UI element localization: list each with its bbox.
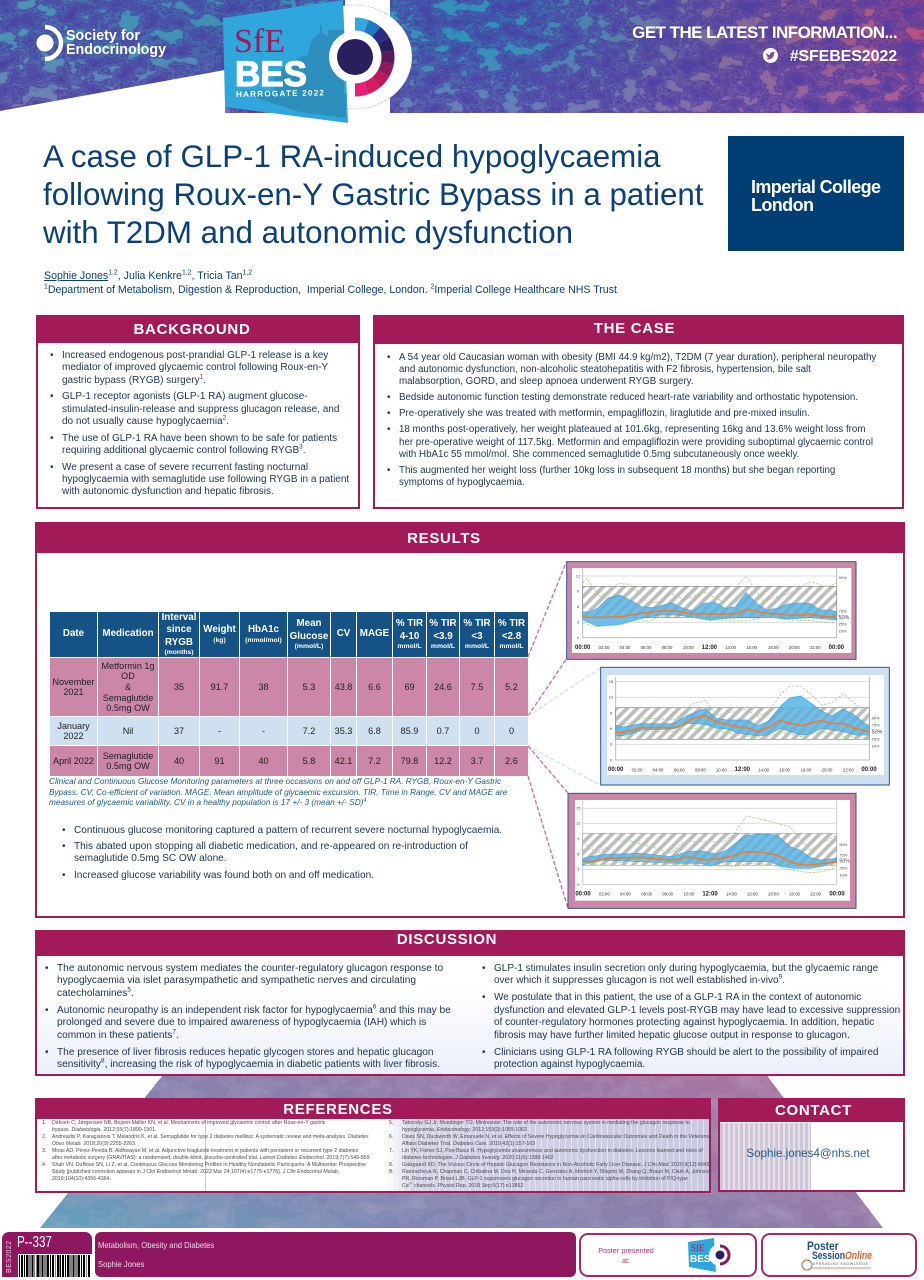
heading: contact: CONTACT [775,1102,852,1119]
results table: 12.2 [434,756,452,766]
text: case bullets: Pre-operatively she was treated with metformin, empagliflozin, liraglutide and pre-mixed insulin. [399,408,810,419]
logo: Imperial College London [728,136,904,251]
header banner [0,0,924,113]
results table [50,612,528,776]
text: results bullets: This abated upon stopping all diabetic medication, and re-appeared on re-introduction of [74,841,468,852]
results table: mmol/L [499,643,524,650]
chart: April 2022 glucose profile: 08:00 [662,891,674,896]
chart: April 2022 glucose profile: 14:00 [726,891,737,896]
title [43,139,704,250]
table caption: Clinical and Continuous Glucose Monitoring parameters at three occasions on and off GLP-1 RA. RYGB, Roux-en-Y Gastric [49,777,501,786]
results table: 0 [474,726,480,736]
building silhouette [240,25,346,118]
chart: November 2021 glucose profile: 10:00 [683,645,694,650]
results table: 37 [174,726,184,736]
results table: 42.1 [335,756,352,766]
results table: 5.2 [505,682,518,692]
text: contact email: Sophie.jones4@nhs.net [746,1147,870,1160]
footer: topic and author bar [95,1232,576,1277]
chart: November 2021 glucose profile: 16:00 [746,645,758,650]
text: references right column: Lin YK, Fisher SJ, Pop-Busui R. Hypoglycemia unawareness and autonomic dysfunction in diabetes: Lessons learned and roles of [402,1148,703,1154]
chart: January 2022 glucose profile: 15 [609,679,614,684]
text: case bullets: symptoms of hypoglycaemia. [399,477,525,488]
chart: November 2021 glucose profile: 90% [839,575,847,580]
chart: January 2022 glucose profile: 00:00 [608,767,624,773]
text: references right column: hypoglycemia. Endocrinology. 2012;153(3):1055-1062 [402,1127,527,1133]
results table: April 2022 [53,756,94,766]
heading: results [35,522,905,553]
chart: January 2022 glucose profile: 3 [610,742,613,747]
heading: discussion: DISCUSSION [397,931,497,948]
text: case bullets: with HbA1c 55 mmol/mol. She commenced semaglutide 0.5mg subcutaneously once weekly. [399,449,799,460]
heading: contact [718,1098,905,1122]
text: references right column: Taborsky GJ Jr, Mundinger TO. Minireview: The role of the autonomic nervous system in mediating the glucagon response to [402,1120,690,1126]
chart: January 2022 glucose profile: 75% [872,723,880,728]
text: background bullets: GLP-1 receptor agonists (GLP-1 RA) augment glucose- [62,391,308,402]
chart: November 2021 glucose profile [567,562,856,659]
authors and affiliations: 1Department of Metabolism, Digestion & Reproduction, Imperial College, London. 2Imperial College Healthcare NHS Trust [44,283,617,296]
results table: Semaglutide 0.5mg OW [103,693,153,713]
text: case bullets: 18 months post-operatively, her weight plateaued at 101.6kg, representing 16kg and 13.6% weight loss from [399,424,865,435]
chart: January 2022 glucose profile: 14:00 [758,767,770,772]
chart: November 2021 glucose profile: 12 [576,573,581,578]
text: references left column: Obes Metab. 2018;20(9):2255-2263. [52,1141,136,1147]
chart: November 2021 glucose profile: 18:00 [768,645,779,650]
text: background bullets: do not usually cause hypoglycaemia2. [62,415,229,427]
panel: contact [718,1098,905,1192]
chart: April 2022 glucose profile: 12 [576,821,581,826]
text: conference code: BES2022 [6,1241,13,1273]
chart: April 2022 glucose profile: 50% [839,859,850,865]
chart: November 2021 glucose profile: 50% [839,615,850,621]
chart: January 2022 glucose profile: 16:00 [779,767,791,772]
text: background bullets: with autonomic dysfunction and hepatic fibrosis. [62,486,274,497]
chart: April 2022 glucose profile: 04:00 [620,891,631,896]
results table: % TIR <3 [463,618,491,642]
footer: Poster Session Online logo [761,1233,917,1277]
logo: Society for Endocrinology [36,24,166,62]
text: case bullets: A 54 year old Caucasian woman with obesity (BMI 44.9 kg/m2), T2DM (7 year duration), peripheral neuropathy [399,352,876,363]
text: discussion right column: over which it suppresses glucagon is not well established in-vivo9. [494,974,785,986]
results table: (kg) [213,637,226,644]
chart: January 2022 glucose profile: 10:00 [716,767,727,772]
heading: the case [373,315,904,344]
results table: 43.8 [335,682,352,692]
text: discussion left column: catecholamines5. [57,986,134,999]
chart: January 2022 glucose profile: 0 [610,757,613,762]
chart: November 2021 glucose profile: 02:00 [599,645,610,650]
chart: April 2022 glucose profile: 00:00 [829,892,845,898]
text: references right column: Ca2+ channels. Physiol Rep. 2018 Sep;6(17):e13852 [402,1181,523,1189]
text: background bullets [50,350,350,497]
text: discussion left column: The presence of liver fibrosis reduces hepatic glycogen stores and hepatic glucagon [57,1047,434,1058]
text: discussion right column: dysfunction and elevated GLP-1 levels post-RYGB may have lead to excessive suppression [494,1005,900,1016]
logo: Imperial College London: London [751,195,813,215]
text: references left column [42,1120,370,1182]
text: case bullets: her pre-operative weight of 117.5kg. Metformin and empagliflozin were providing suboptimal glycaemic control [399,437,873,448]
barcode [18,1254,92,1277]
chart: November 2021 glucose profile: 14:00 [725,645,737,650]
text: references right column: Galsgaard KD. The Vicious Circle of Hepatic Glucagon Resistance in Non-Alcoholic Fatty Liver Disease. J Clin Med. 2020;9(12):4049 [402,1162,710,1168]
chart: April 2022 glucose profile: 16:00 [747,891,758,896]
chart: April 2022 glucose profile: 25% [839,865,848,870]
panel: the case [373,315,904,509]
text: results bullets: Continuous glucose monitoring captured a pattern of recurrent severe nocturnal hypoglycaemia. [74,825,502,836]
chart: November 2021 glucose profile: 08:00 [662,645,673,650]
text: background bullets: gastric bypass (RYGB) surgery1. [62,373,206,386]
text: references right column: Ramracheya R, Chapman C, Chibalina M, Dou H, Miranda C, González A, Moritoh Y, Shigeto M, Zhang Q, Braun M, Clark A, Johnson [402,1169,711,1175]
chart: April 2022 glucose profile: 02:00 [599,891,610,896]
authors and affiliations: Sophie Jones1,2, Julia Kenkre1,2, Tricia Tan1,2 [44,269,252,282]
results table: % TIR <2.8 [498,618,525,642]
results table: 3.7 [471,756,483,766]
chart: April 2022 glucose profile: 06:00 [641,891,653,896]
panel: references: 3. [42,1148,46,1154]
chart: January 2022 glucose profile: 04:00 [653,767,664,772]
panel: discussion [35,930,905,1076]
results table: (mmol/mol) [245,637,282,644]
text: references left column: bypass. Diabetologia. 2012;55(7):1890-1901. [52,1127,156,1133]
results table: 91 [214,756,225,766]
results table: 0 [509,726,514,736]
chart: April 2022 glucose profile: 10% [839,873,848,878]
chart: November 2021 glucose profile: 0 [577,635,580,640]
footer: topic and author bar: Sophie Jones [98,1259,144,1269]
chart: January 2022 glucose profile [601,667,889,785]
text: background bullets: Increased endogenous post-prandial GLP-1 release is a key [62,350,328,361]
chart: November 2021 glucose profile: 12:00 [702,645,718,651]
chart: November 2021 glucose profile: 00:00 [829,645,845,651]
panel: background [36,315,360,509]
heading: discussion [35,930,905,956]
results table: 40 [258,756,269,766]
text: results bullets: Increased glucose variability was found both on and off medication. [74,870,374,881]
results table: - [218,726,221,736]
authors and affiliations [44,269,617,296]
results table: MAGE [360,628,389,639]
text: discussion left column: common in these patients7. [57,1028,179,1041]
panel: references [35,1098,711,1193]
chart: November 2021 glucose profile: 3 [577,620,580,625]
results table: 91.7 [211,682,228,692]
footer: Poster Session Online logo: Poster [807,1240,839,1253]
title: with T2DM and autonomic dysfunction [43,215,573,250]
text: references left column: Study [published correction appears in J Clin Endocrinol Metab. 2022 Mar 24;107(4):e1775-e1776]. J Clin Endocrinol Metab. [52,1169,339,1175]
results table: Semaglutide 0.5mg OW [103,751,153,771]
chart: April 2022 glucose profile: 12:00 [702,892,718,898]
logo: SfE BES Harrogate 2022: SfE [234,23,285,60]
chart: November 2021 glucose profile: 6 [577,604,580,609]
text: references left column: after metabolic surgery (GRAVITAS): a randomised, double-blind, placebo-controlled trial. Lancet Diabetes Endocrinol. 2019;7(7):549-559 [52,1155,369,1161]
results table: 40 [174,756,184,766]
text: background bullets: hypoglycaemia with semaglutide use following RYGB in a patient [62,474,349,485]
results table: 5.8 [303,756,315,766]
results table: Nil [123,726,133,736]
chart: January 2022 glucose profile: 06:00 [674,767,685,772]
chart: January 2022 glucose profile: 08:00 [695,767,706,772]
results table: & [125,682,131,692]
text: discussion right column: We postulate that in this patient, the use of a GLP-1 RA in the context of autonomic [494,992,861,1003]
results table: Interval since RYGB [162,612,196,648]
chart: January 2022 glucose profile: 20:00 [822,767,833,772]
text: discussion right column: Clinicians using GLP-1 RA following RYGB should be alert to the possibility of impaired [494,1047,878,1058]
text: discussion left column: The autonomic nervous system mediates the counter-regulatory glucagon response to [57,963,443,974]
results table: 6.6 [368,682,381,692]
heading: background [36,315,360,343]
text: references right column [389,1120,711,1189]
chart: April 2022 glucose profile: 9 [577,836,580,841]
text: references right column: diabetes technologies. J Diabetes Investig. 2020;11(6):1388-1402 [402,1155,554,1161]
table caption [49,777,508,807]
panel: references: 9. [389,1169,393,1175]
chart: January 2022 glucose profile: 22:00 [843,767,854,772]
table caption: measures of glycaemic variability. CV in a healthy population is 17 +/- 3 (mean +/- SD)4 [49,798,366,807]
text: discussion left column [45,963,451,1070]
results table: January 2022 [57,721,90,741]
text: case bullets: This augmented her weight loss (further 10kg loss in subsequent 18 months) but she began reporting [399,465,835,476]
chart: January 2022 glucose profile: 6 [610,726,613,731]
results table: 35.3 [335,726,352,736]
panel: references: 4. [42,1162,46,1168]
chart: January 2022 glucose profile: 00:00 [861,767,877,773]
chart: January 2022 glucose profile: 50% [872,730,883,736]
connector lines and AGP charts [527,561,890,909]
text: references left column: Miras AD, Pérez-Pevida B, Aldhwayan M, et al. Adjunctive liraglutide treatment in patients with persistent or recurrent type 2 diabetes [52,1148,358,1154]
chart: November 2021 glucose profile: 75% [839,608,847,613]
results table: mmol/L [431,643,455,650]
banner call to action: GET THE LATEST INFORMATION... [632,23,897,42]
text: references left column: Dirksen C, Jørgensen NB, Bojsen-Møller KN, et al. Mechanisms of improved glycaemic control after Roux-en-Y gastric [52,1120,325,1126]
title: following Roux-en-Y Gastric Bypass in a patient [43,177,703,212]
text: references left column: 2019;104(10):4356-4364. [52,1176,111,1182]
panel: references: 6. [389,1134,393,1140]
results table: (mmol/L) [295,643,323,650]
text: poster presented at [598,1246,654,1265]
results table: 0.7 [437,726,449,736]
results table: CV [337,628,350,639]
chart: January 2022 glucose profile: 10% [872,744,880,749]
footer: poster presented at [579,1233,757,1277]
decorative stripes [720,1123,811,1190]
chart: April 2022 glucose profile: 18:00 [768,891,779,896]
chart: January 2022 glucose profile: 18:00 [801,767,812,772]
text: discussion right column: fibrosis may have further limited hepatic glucose output in response to glucagon. [494,1030,850,1041]
results table: mmol/L [397,643,422,650]
logo: SfE BES Harrogate 2022 [223,0,412,123]
chart: April 2022 glucose profile: 90% [839,842,848,847]
logo: SfE BES Harrogate 2022: BES [235,55,307,94]
logo: Society for Endocrinology: Endocrinology [66,42,166,58]
results table: Medication [102,628,154,639]
chart: November 2021 glucose profile: 00:00 [575,645,591,651]
text: references left column: Andreadis P, Karagiannis T, Malandris K, et al. Semaglutide for type 2 diabetes mellitus: A systematic review and meta-analysis. Diabetes [52,1134,369,1140]
text: poster presented at: Poster presented [598,1246,654,1255]
text: references right column: Davis SN, Duckworth W, Emanuele N, et al. Effects of Severe Hypoglycemia on Cardiovascular Outcomes and Death in the Veterans [402,1134,709,1140]
panel: results [35,522,905,918]
chart: April 2022 glucose profile: 22:00 [810,891,822,896]
text: case bullets [387,352,876,488]
heading: references [35,1098,711,1119]
text: references right column: Affairs Diabetes Trial. Diabetes Care. 2019;42(1):157-163 [402,1141,535,1147]
results table: HbA1c [248,624,279,635]
results table: 7.2 [368,756,381,766]
text: poster presented at: at: [622,1256,630,1265]
chart: November 2021 glucose profile: 25% [839,622,847,627]
results table: 35 [174,682,184,692]
results table: mmol/L [465,643,489,650]
text: results bullets [62,825,502,881]
logo: small BES: SfE [691,1243,705,1253]
results table: Date [63,628,84,639]
text: background bullets: mediator of improved glycaemic control following Roux-en-Y [62,362,328,373]
text: discussion left column: sensitivity8, increasing the risk of hypoglycaemia in diabetic patients with liver fibrosis. [57,1058,440,1070]
text: case bullets: and autonomic dysfunction, non-alcoholic steatohepatitis with F2 fibrosis, hypertension, bile salt [399,364,811,375]
text: background bullets: stimulated-insulin-release and suppress glucagon release, and [62,404,339,415]
white wedge [0,70,225,114]
chart: January 2022 glucose profile: 12 [609,695,614,700]
text: references left column: Shah VN, DuBose SN, Li Z, et al. Continuous Glucose Monitoring Profiles in Healthy Nondiabetic Participants: A Multicenter Prospective [52,1162,366,1168]
chart: November 2021 glucose profile: 9 [577,588,580,593]
logo: small BES [688,1238,730,1272]
chart: April 2022 glucose profile: 10:00 [684,891,695,896]
icon: twitter [763,48,778,63]
chart: November 2021 glucose profile: 04:00 [620,645,631,650]
footer: poster id and barcode [2,1232,92,1277]
panel: references: 5. [389,1120,393,1126]
heading: background: BACKGROUND [134,321,250,338]
results table: 5.3 [303,682,315,692]
results table: November 2021 [53,677,94,697]
footer: topic and author bar: Metabolism, Obesity and Diabetes [98,1240,214,1250]
text: background bullets: The use of GLP-1 RA have been shown to be safe for patients [62,433,337,444]
decorative stripes [205,1119,206,1191]
chart: January 2022 glucose profile: 12:00 [735,767,751,773]
results table: 7.2 [303,726,315,736]
logo: Society for Endocrinology: Society for [66,28,140,44]
results table: - [262,726,265,736]
chart: April 2022 glucose profile: 20:00 [789,891,801,896]
text: results bullets: semaglutide 0.5mg SC OW alone. [74,853,227,864]
results table: Mean Glucose [290,618,328,642]
text: discussion right column: GLP-1 stimulates insulin secretion only during hypoglycaemia, but the glycaemic range [494,963,878,974]
panel: references: 7. [389,1148,393,1154]
text: poster number: P--337 [17,1234,52,1251]
results table: 2.6 [505,756,518,766]
text: background bullets: We present a case of severe recurrent fasting nocturnal [62,462,308,473]
results table: 38 [258,682,269,692]
chart: April 2022 glucose profile: 15 [576,806,581,811]
panel: references: 1. [42,1120,46,1126]
chart: January 2022 glucose profile: 02:00 [632,767,643,772]
chart: April 2022 glucose profile: 6 [577,851,580,856]
results table: % TIR <3.9 [429,618,457,642]
text: case bullets: Bedside autonomic function testing demonstrate reduced heart-rate variability and orthostatic hypotension. [399,392,858,403]
title: A case of GLP-1 RA-induced hypoglycaemia [43,139,661,174]
chart: January 2022 glucose profile: 90% [872,716,880,721]
results table: Weight [203,624,236,635]
banner call to action: #SFEBES2022 [790,48,897,65]
heading: the case: THE CASE [594,320,675,337]
chart: April 2022 glucose profile: 00:00 [575,892,591,898]
results table: Metformin 1g OD [101,661,155,681]
results table: 24.6 [434,682,452,692]
results table: (months) [164,649,194,656]
chart: November 2021 glucose profile: 10% [839,629,847,634]
text: discussion right column: of counter-regulatory hormones protecting against hypoglycaemia. In addition, hepatic [494,1017,874,1028]
logo: Imperial College London: Imperial College [751,177,880,197]
results table: 69 [404,682,415,692]
panel: references: 8. [389,1162,393,1168]
footer: Poster Session Online logo: Online [845,1250,872,1262]
background shape: tissue trapezoid [40,1076,883,1228]
text: discussion right column: protection against hypoglycaemia. [494,1059,645,1070]
results table: 79.8 [401,756,418,766]
text: discussion left column: prolonged and severe due to impaired awareness of hypoglycaemia (IAH) which is [57,1017,426,1028]
text: background bullets: requiring additional glycaemic control following RYGB3. [62,444,306,456]
footer: Poster Session Online logo: SPREADING KNOWLEDGE [813,1262,869,1266]
footer: Poster Session Online logo: Session [812,1250,845,1262]
results table: % TIR 4-10 [396,618,423,642]
chart: November 2021 glucose profile: 22:00 [810,645,821,650]
logo: small BES: BES [690,1254,711,1265]
heading: results: RESULTS [407,530,481,547]
heading: references: REFERENCES [283,1101,393,1118]
banner call to action [632,23,897,65]
text: discussion right column [482,963,900,1070]
chart: April 2022 glucose profile: 0 [577,882,580,887]
chart: November 2021 glucose profile: 06:00 [641,645,652,650]
chart: January 2022 glucose profile: 9 [610,710,613,715]
text: discussion left column: hypoglycaemia via islet parasympathetic and sympathetic nerves and circulating [57,975,416,986]
arrows: connector lines [528,562,600,908]
panel: references: 2. [42,1134,46,1140]
chart: April 2022 glucose profile: 3 [577,867,580,872]
table caption: Bypass. CV, Co-efficient of variation. MAGE, Mean amplitude of glycaemic excursion. TIR, Time in Range. CV and MAGE are [49,788,507,797]
logo: SfE BES Harrogate 2022: HARROGATE 2022 [236,88,324,99]
chart: April 2022 glucose profile: 75% [839,852,848,857]
results table: 7.5 [471,682,483,692]
chart: January 2022 glucose profile: 25% [872,736,880,741]
chart: November 2021 glucose profile: 20:00 [789,645,800,650]
chart: April 2022 glucose profile [568,793,856,908]
results table: 85.9 [401,726,418,736]
results table: 6.8 [368,726,381,736]
text: case bullets: malabsorption, GORD, and sleep apnoea underwent RYGB surgery. [399,376,693,387]
text: references right column: PR, Rorsman P, Briant LJB. GLP-1 suppresses glucagon secretion in human pancreatic alpha-cells by inhibition of P/Q-type [402,1176,688,1182]
text: discussion left column: Autonomic neuropathy is an independent risk factor for hypoglycaemia6 and this may be [57,1003,451,1016]
